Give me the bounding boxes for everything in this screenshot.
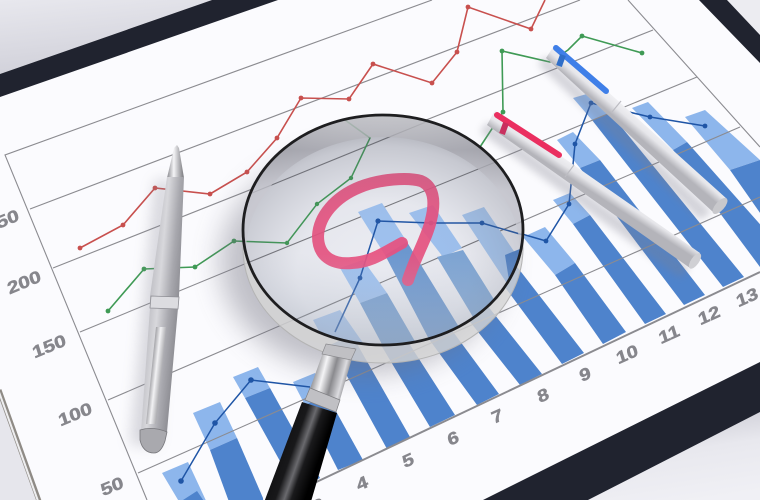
silver pen xyxy=(130,145,184,453)
blue pen end xyxy=(710,196,730,216)
x axis labels: 4 xyxy=(354,472,371,494)
bar 3 xyxy=(233,367,320,490)
lens black ring xyxy=(243,115,523,345)
x axis labels: 5 xyxy=(400,449,416,471)
blue pen shadow xyxy=(538,56,712,220)
bar 12 xyxy=(557,132,705,305)
black handle xyxy=(263,402,337,500)
bar 14 xyxy=(632,102,760,271)
lens green line xyxy=(234,120,370,245)
lens lower right bar xyxy=(505,249,520,278)
x axis labels: 13 xyxy=(734,283,760,311)
blue pen ring xyxy=(559,55,563,66)
x axis labels: 9 xyxy=(577,363,593,385)
bar chart xyxy=(162,93,760,500)
x axis labels xyxy=(310,283,760,500)
lens outer metal rim xyxy=(243,133,523,363)
pen tip xyxy=(167,145,184,178)
red pen cap seam xyxy=(565,165,574,177)
lens shadow xyxy=(220,150,504,374)
bar 13 xyxy=(573,93,744,287)
red hand-drawn circle mark xyxy=(318,179,433,280)
y axis labels: 100 xyxy=(56,399,94,431)
blue pen body xyxy=(546,44,727,212)
bar 4 xyxy=(293,373,363,470)
x axis labels: 8 xyxy=(535,384,551,406)
lens inner upper rim xyxy=(245,116,522,242)
bar 10 xyxy=(523,227,626,344)
lens shading xyxy=(244,116,522,324)
red pen clip xyxy=(497,115,559,155)
x axis labels: 11 xyxy=(656,321,682,348)
lens bar E xyxy=(313,310,362,342)
lens grid lines xyxy=(250,122,522,320)
bar 9 xyxy=(470,232,584,364)
bar 11 xyxy=(553,193,666,324)
bar 1 xyxy=(162,462,215,500)
silver edge at lower left xyxy=(0,390,39,500)
x axis labels: 10 xyxy=(614,340,640,368)
pen end cap xyxy=(140,428,167,453)
x axis labels: 6 xyxy=(445,427,461,449)
red line series xyxy=(78,0,545,250)
red pen end xyxy=(687,251,703,271)
handle collar xyxy=(305,344,356,412)
lens view xyxy=(244,116,522,344)
bar 2 xyxy=(193,402,264,500)
red pen body xyxy=(487,110,700,268)
bar 6 xyxy=(372,320,455,427)
red pen ring xyxy=(502,123,506,134)
bar 15 xyxy=(685,110,760,270)
pen shadow xyxy=(130,180,172,445)
pen barrel xyxy=(141,177,184,432)
pen clip xyxy=(146,327,166,424)
lens bar D xyxy=(462,207,514,282)
x axis labels: 7 xyxy=(489,405,505,427)
magnifying glass xyxy=(220,100,560,500)
y axis labels xyxy=(0,206,126,500)
lens bar B xyxy=(340,266,414,344)
y axis labels: 200 xyxy=(5,267,43,299)
red cap pen xyxy=(480,110,703,278)
lens lower fade xyxy=(272,266,514,344)
y axis labels: 150 xyxy=(30,331,68,363)
lens bar C xyxy=(409,207,494,316)
blue line series xyxy=(178,101,707,484)
blue pen cap seam xyxy=(612,101,621,112)
blue pen clip xyxy=(556,48,606,91)
red pen shadow xyxy=(480,122,690,278)
lens bar A xyxy=(358,203,462,345)
pen collar xyxy=(150,296,179,309)
bar 7 xyxy=(415,310,499,405)
blue cap pen xyxy=(538,44,730,220)
x axis labels: 12 xyxy=(696,301,722,329)
bar 5 xyxy=(330,335,410,449)
y axis labels: 50 xyxy=(99,474,126,500)
lens blue line xyxy=(335,218,530,332)
bar 8 xyxy=(445,280,542,385)
lens base xyxy=(243,115,523,345)
green line series xyxy=(106,34,644,313)
